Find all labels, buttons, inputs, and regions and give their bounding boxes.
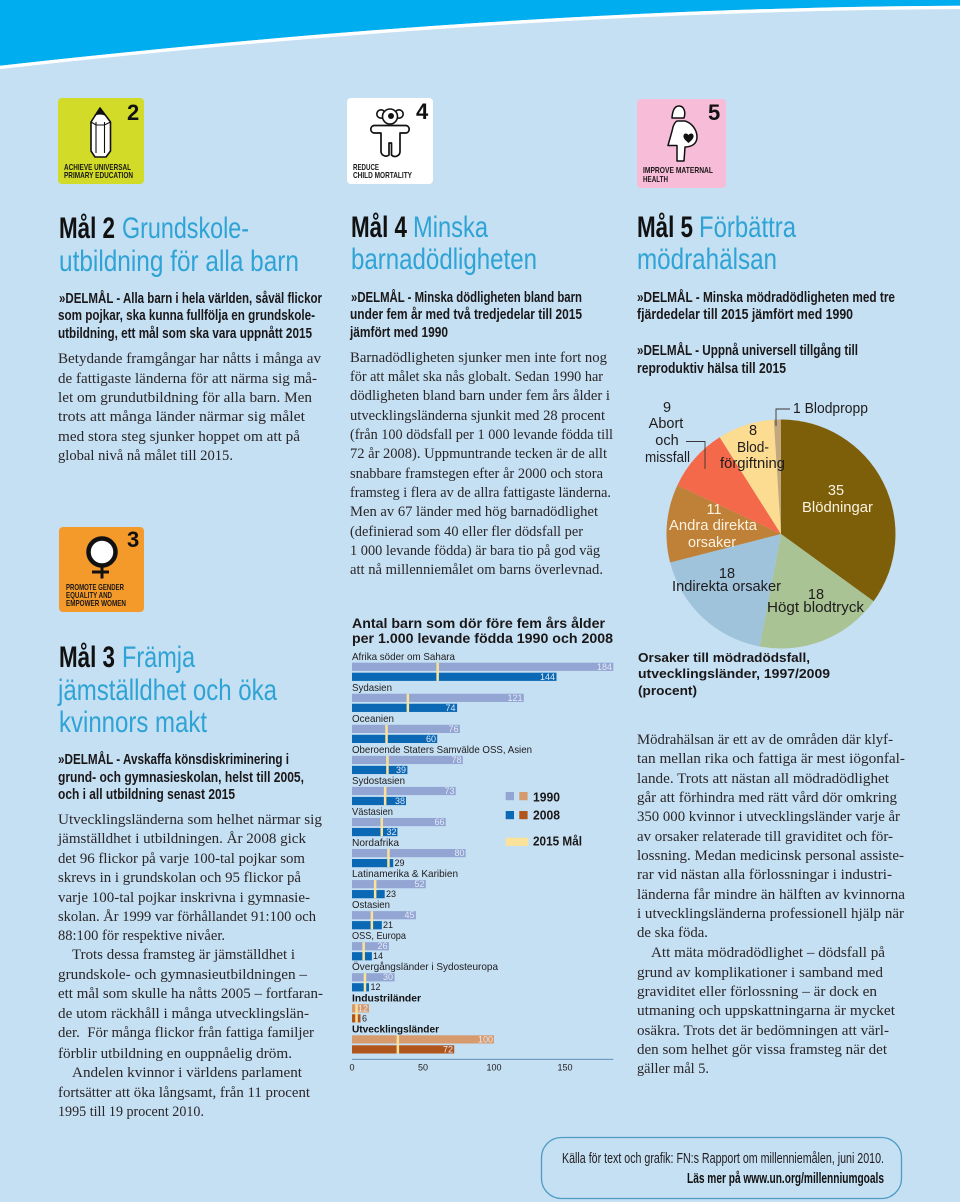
row: Västasien: 66 [434, 817, 444, 827]
panel: goal 4 [347, 98, 613, 1073]
heading: goal 3: jämställdhet och öka [57, 674, 277, 707]
heading: goal 2: Grundskole- [122, 212, 249, 245]
row: Oberoende Staters Samvälde OSS, Asien [352, 744, 532, 775]
icon: goal 4 teddy badge: CHILD MORTALITY [353, 170, 412, 180]
pie caption: utvecklingsländer, 1997/2009 [638, 666, 830, 681]
heading: goal 3: Mål 3 [59, 641, 115, 674]
target text: goal 4: under fem år med två tredjedelar till 2015 [350, 307, 582, 323]
pie labels: 8 [749, 423, 757, 439]
heading: goal 2: Mål 2 [59, 212, 115, 245]
pie labels [645, 400, 873, 616]
row: Industriländer: Industriländer [352, 992, 421, 1004]
row: Industriländer [352, 992, 421, 1024]
pie leader lines [686, 409, 790, 469]
row: Övergångsländer i Sydosteuropa: Övergångsländer i Sydosteuropa [352, 961, 498, 973]
body text: goal 4: (från 100 dödsfall per 1 000 levande födda till [350, 427, 613, 443]
target text: goal 5: »DELMÅL - Uppnå universell tillgång till [637, 342, 858, 359]
icon: goal 5 maternal badge: 5 [708, 100, 720, 125]
heading: goal 3: Främja [122, 641, 195, 674]
target text: goal 4: »DELMÅL - Minska dödligheten bland barn [351, 289, 582, 306]
target text: goal 5: »DELMÅL - Minska mödradödligheten med tre [637, 289, 895, 306]
icon: goal 4 teddy badge [347, 98, 433, 184]
row: Västasien [352, 806, 446, 837]
target text: goal 3: »DELMÅL - Avskaffa könsdiskriminering i [58, 751, 289, 768]
row: Sydasien: 74 [445, 703, 456, 713]
body text: goal 5 [637, 732, 906, 1077]
row: Nordafrika: 29 [394, 858, 405, 868]
body text: goal 5: 350 000 kvinnor i utvecklingsländer varje år [637, 809, 900, 825]
body text: goal 2: trots att många länder närmar sig målet [58, 409, 305, 425]
icon: goal 2 pencil badge: 2 [127, 100, 139, 125]
body text: goal 2: med stora steg sjunker hoppet om att på [58, 429, 301, 445]
chart legend: 1990 [533, 790, 560, 804]
pie labels: 9 [663, 400, 671, 416]
row: Västasien: Västasien [352, 806, 393, 818]
row: Övergångsländer i Sydosteuropa: 12 [370, 982, 381, 992]
pie labels: orsaker [688, 535, 736, 551]
row: Oberoende Staters Samvälde OSS, Asien: 78 [451, 755, 462, 765]
target text: goal 4: jämfört med 1990 [349, 325, 448, 341]
icon: goal 4 teddy badge: 4 [416, 99, 429, 124]
body text: goal 3: Andelen kvinnor i världens parlament [72, 1065, 302, 1081]
body text: goal 3: 1995 till 19 procent 2010. [58, 1104, 204, 1120]
body text: goal 4: (definierad som 40 eller fler dödsfall per [350, 524, 583, 540]
body text: goal 5: lande. Trots att nästan all mödradödlighet [637, 771, 889, 787]
body text: goal 4: Barnadödligheten sjunker men inte fort nog [350, 350, 607, 366]
icon: goal 5 maternal badge [637, 99, 726, 188]
row: Övergångsländer i Sydosteuropa: 30 [383, 972, 393, 982]
body text: goal 3: 88:100 för respektive nivåer. [58, 928, 225, 944]
body text: goal 5: graviditet eller förlossning – är dock en [637, 984, 878, 1000]
pie labels: 35 [828, 483, 844, 499]
body text: goal 5: grund av komplikationer i samband med [637, 965, 884, 981]
icon: goal 5 maternal badge: IMPROVE MATERNAL [643, 165, 713, 175]
row: Afrika söder om Sahara: 144 [540, 672, 555, 682]
target text: goal 3: och i all utbildning senast 2015 [58, 787, 235, 803]
body text: goal 4: att nå millenniemålet om barns överlevnad. [350, 562, 603, 578]
body text: goal 2: de fattigaste länderna för att närma sig må- [58, 371, 317, 387]
row: Sydostasien: Sydostasien [352, 775, 405, 787]
heading: goal 2: utbildning för alla barn [59, 245, 299, 278]
row: Oceanien: 60 [426, 734, 436, 744]
body text: goal 4: dödligheten bland barn under fem års ålder i [350, 388, 610, 404]
body text: goal 2: global nivå nå målet till 2015. [58, 448, 233, 464]
body text: goal 5: av orsaker relaterade till graviditet och för- [637, 829, 893, 845]
body text: goal 5: gäller mål 5. [637, 1061, 709, 1077]
body text: goal 4: 1 000 levande födda) är bara tio på god väg [350, 543, 600, 559]
icon: goal 3 gender badge: PROMOTE GENDER [66, 582, 124, 592]
row: Ostasien: Ostasien [352, 899, 390, 911]
row: Afrika söder om Sahara: 184 [597, 662, 612, 672]
body text: goal 5: utmaning och uppskattningarna är mycket [637, 1003, 895, 1019]
row: Afrika söder om Sahara [352, 651, 613, 682]
chart axis: 0 [349, 1063, 355, 1073]
body text: goal 3: der. För många flickor från fattiga familjer [58, 1025, 314, 1041]
row: Utvecklingsländer [352, 1024, 494, 1054]
body text: goal 4: 72 år 2008). Uppmuntrande tecken är de allt [350, 446, 607, 462]
row: Oberoende Staters Samvälde OSS, Asien: 39 [396, 765, 406, 775]
body text: goal 3: de utom räckhåll i många utvecklingslän- [58, 1006, 309, 1022]
row: Sydasien: Sydasien [352, 682, 392, 694]
body text: goal 3: fortsätter att öka långsamt, från 11 procent [58, 1085, 310, 1101]
target text: goal 3: grund- och gymnasieskolan, helst till 2005, [58, 770, 304, 786]
row: Sydostasien: 73 [444, 786, 454, 796]
pie caption [638, 650, 830, 698]
body text: goal 4: Men av 67 länder med hög barnadödlighet [350, 504, 598, 520]
heading: goal 3 [57, 641, 277, 739]
body text: goal 3 [57, 812, 323, 1120]
pie labels: förgiftning [720, 456, 785, 472]
chart legend: 2015 Mål [533, 835, 582, 849]
chart legend: 2008 [533, 808, 560, 822]
chart axis [349, 1059, 613, 1073]
row: Utvecklingsländer: Utvecklingsländer [352, 1024, 439, 1036]
row: Industriländer: 12 [358, 1004, 368, 1014]
row: Ostasien: 21 [383, 920, 393, 930]
chart title: per 1.000 levande födda 1990 och 2008 [352, 630, 613, 646]
body text: goal 4: framsteg i flera av de allra fattigaste länderna. [350, 485, 611, 501]
panel: goal 2 [58, 98, 322, 464]
pie labels: Blödningar [802, 500, 873, 516]
body text: goal 5: Att mäta mödradödlighet – dödsfall på [651, 945, 886, 961]
body text: goal 3: jämställdhet i utbildningen. År 2008 gick [57, 831, 307, 847]
target text: goal 5: fjärdedelar till 2015 jämfört med 1990 [637, 307, 853, 323]
row: Oceanien: Oceanien [352, 713, 394, 725]
body text: goal 3: ett mål som skulle ha nåtts 2005 – fortfaran- [58, 986, 323, 1002]
heading: goal 2 [59, 212, 299, 278]
pie caption: (procent) [638, 683, 697, 698]
chart axis: 150 [557, 1063, 573, 1073]
body text: goal 5: den som helhet gör vissa framsteg när det [637, 1042, 887, 1058]
row: OSS, Europa: OSS, Europa [352, 930, 406, 942]
heading: goal 4: Minska [413, 211, 488, 244]
icon: goal 2 pencil badge: ACHIEVE UNIVERSAL [64, 162, 131, 172]
body text: goal 2 [58, 351, 322, 464]
body text: goal 5: i utvecklingsländerna professionell hjälp när [637, 906, 904, 922]
body text: goal 5: går att förhindra med rätt vård dör omkring [637, 790, 897, 806]
body text: goal 3: skrevs in i grundskolan och 95 flickor på [58, 870, 302, 886]
target text: goal 2: utbildning, ett mål som ska vara uppnått 2015 [58, 326, 312, 342]
row: Sydostasien: 38 [395, 796, 405, 806]
heading: goal 3: kvinnors makt [59, 706, 208, 739]
body text: goal 3: Utvecklingsländerna som helhet närmar sig [58, 812, 322, 828]
body text: goal 5: Mödrahälsan är ett av de områden där klyf- [637, 732, 893, 748]
body text: goal 4: utvecklingsländerna sjunkit med 28 procent [350, 408, 605, 424]
body text: goal 5: osäkra. Trots det är bedömningen att värl- [637, 1023, 889, 1039]
row: Latinamerika & Karibien: 23 [386, 889, 396, 899]
body text: goal 5: tan mellan rika och fattiga är mest iögonfal- [637, 751, 905, 767]
body text: goal 4: för att målet ska nås globalt. Sedan 1990 har [350, 369, 603, 385]
body text: goal 3: grundskole- och gymnasieutbildningen – [58, 967, 308, 983]
pie labels: missfall [645, 450, 690, 466]
panel: goal 3 [57, 527, 323, 1120]
body text: goal 3: skolan. År 1999 var förhållandet 91:100 och [58, 909, 317, 925]
icon: goal 3 gender badge: EQUALITY AND [66, 590, 112, 600]
chart title [352, 615, 613, 646]
heading: goal 5: Förbättra [699, 211, 796, 244]
body text: goal 3: förblir utbildning en ouppnåelig dröm. [58, 1046, 292, 1062]
row: Utvecklingsländer: 72 [443, 1044, 453, 1054]
chart axis: 50 [418, 1063, 428, 1073]
icon: goal 3 gender badge: 3 [127, 527, 139, 552]
body text: goal 5: de ska föda. [637, 925, 708, 941]
chart title: Antal barn som dör före fem års ålder [352, 615, 606, 631]
row: Ostasien: 45 [404, 910, 414, 920]
pie labels: Abort [649, 416, 683, 432]
icon: goal 2 pencil badge: PRIMARY EDUCATION [64, 170, 133, 180]
heading: goal 4 [351, 211, 537, 276]
row: Utvecklingsländer: 100 [478, 1034, 493, 1044]
icon: goal 5 maternal badge: HEALTH [643, 174, 668, 184]
source box [542, 1138, 902, 1198]
row: Nordafrika [352, 837, 466, 868]
pie labels: Indirekta orsaker [672, 579, 781, 595]
chart legend [506, 790, 582, 849]
chart axis: 100 [486, 1063, 502, 1073]
row: Sydasien: 121 [507, 693, 522, 703]
body text: goal 4: snabbare framstegen efter år 2000 och stora [350, 466, 604, 482]
bar chart: child mortality [349, 615, 613, 1073]
heading: goal 5: mödrahälsan [637, 243, 777, 276]
body text: goal 3: varje 100-tal pojkar inskrivna i gymnasie- [58, 890, 310, 906]
pie labels: 1 Blodpropp [793, 401, 868, 417]
row: Sydostasien [352, 775, 456, 806]
row: Latinamerika & Karibien: Latinamerika & Karibien [352, 868, 458, 880]
pie labels: 18 [719, 566, 735, 582]
target text: goal 5 [637, 289, 895, 377]
row: OSS, Europa: 14 [373, 951, 383, 961]
icon: goal 2 pencil badge [58, 98, 144, 184]
target text: goal 4 [349, 289, 582, 341]
target text: goal 5: reproduktiv hälsa till 2015 [637, 361, 786, 377]
row: Oceanien [352, 713, 460, 744]
top swoosh banner [0, 0, 960, 67]
icon: goal 3 gender badge: EMPOWER WOMEN [66, 598, 126, 608]
target text: goal 2: som pojkar, ska kunna fullfölja en grundskole- [58, 308, 315, 324]
body text: goal 2: Betydande framgångar har nåtts i många av [58, 351, 322, 367]
heading: goal 5 [637, 211, 796, 276]
row: Ostasien [352, 899, 416, 930]
pie chart: causes of maternal death [645, 400, 895, 649]
target text: goal 3 [58, 751, 304, 803]
panel: goal 5 [637, 99, 906, 1077]
body text: goal 5: rar vid nästan alla förlossningar i industri- [637, 867, 892, 883]
icon: goal 3 gender badge [59, 527, 144, 612]
target text: goal 2: »DELMÅL - Alla barn i hela världen, såväl flickor [59, 290, 322, 307]
pie caption: Orsaker till mödradödsfall, [638, 650, 810, 665]
body text: goal 5: lossning. Medan medicinsk personal assiste- [637, 848, 904, 864]
row: Afrika söder om Sahara: Afrika söder om Sahara [352, 651, 455, 663]
pie labels: Högt blodtryck [767, 600, 865, 616]
pie labels: 11 [706, 502, 722, 518]
body text: goal 4 [350, 350, 613, 578]
pie labels: Andra direkta [669, 518, 758, 534]
icon: goal 4 teddy badge: REDUCE [353, 162, 379, 172]
heading: goal 4: Mål 4 [351, 211, 407, 244]
pie labels: Blod- [737, 440, 769, 456]
row: Latinamerika & Karibien: 52 [414, 879, 424, 889]
pie labels: och [655, 433, 679, 449]
body text: goal 2: let om grundutbildning för alla barn. Men [58, 390, 313, 406]
row: Latinamerika & Karibien [352, 868, 458, 899]
row: Nordafrika: 80 [454, 848, 464, 858]
body text: goal 3: det 96 flickor på varje 100-tal pojkar som [58, 851, 306, 867]
row: Oceanien: 76 [448, 724, 458, 734]
row: OSS, Europa [352, 930, 406, 961]
row: Sydasien [352, 682, 524, 713]
row: Oberoende Staters Samvälde OSS, Asien: Oberoende Staters Samvälde OSS, Asien [352, 744, 532, 756]
row: OSS, Europa: 26 [377, 941, 388, 951]
pie slices [666, 419, 895, 649]
heading: goal 5: Mål 5 [637, 211, 693, 244]
row: Industriländer: 6 [362, 1014, 367, 1024]
target text: goal 2 [58, 290, 322, 342]
row: Övergångsländer i Sydosteuropa [352, 961, 498, 992]
body text: goal 3: Trots dessa framsteg är jämställdhet i [72, 947, 295, 963]
heading: goal 4: barnadödligheten [351, 243, 537, 276]
pie labels: 18 [808, 587, 824, 603]
row: Nordafrika: Nordafrika [352, 837, 399, 849]
body text: goal 5: länderna får mindre än hälften av kvinnorna [637, 887, 906, 903]
row: Västasien: 32 [386, 827, 396, 837]
